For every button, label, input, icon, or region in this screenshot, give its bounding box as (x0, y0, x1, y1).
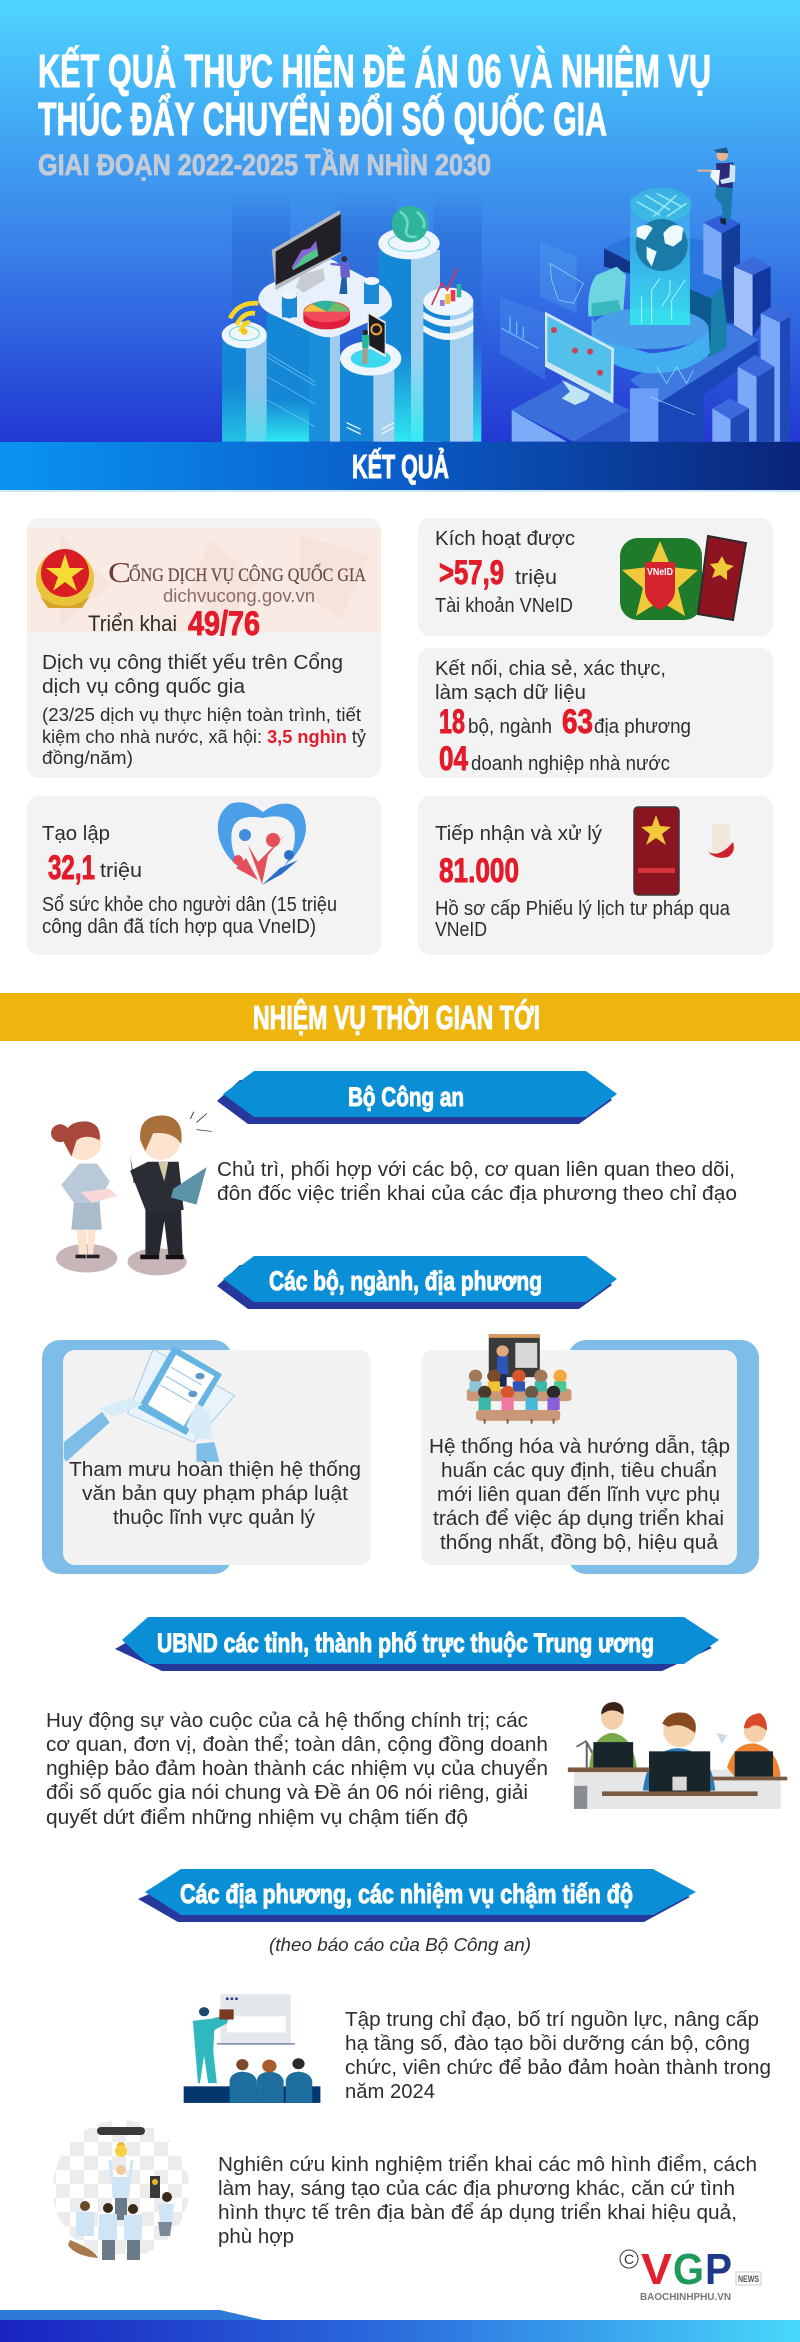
text: Hệ thống hóa và hướng dẫn, tập (429, 1435, 730, 1458)
text: UBND duties: Huy động sự vào cuộc của cả hệ thống chính trị; các (46, 1710, 528, 1732)
text: task one: hạ tầng số, đào tạo bồi dưỡng cán bộ, công (345, 2033, 750, 2055)
text: task one: Tập trung chỉ đạo, bố trí nguồn lực, nâng cấp (345, 2009, 759, 2031)
text: task two (218, 2154, 757, 2248)
text: Bộ Công an duties: đôn đốc việc triển khai của các địa phương theo chỉ đạo (217, 1183, 737, 1205)
text: trách để việc áp dụng triển khai (433, 1508, 724, 1530)
monitor with map (545, 312, 614, 405)
text: văn bản quy phạm pháp luật (82, 1483, 348, 1505)
figure: top person (110, 2160, 132, 2220)
logo: VGP: G (673, 2245, 704, 2294)
panel: VNeID accounts: Tài khoản VNeID (435, 595, 573, 617)
logo: VGP: NEWS (738, 2274, 759, 2284)
panel: health records (27, 796, 381, 955)
logo: VGP: P (705, 2245, 732, 2294)
panel: data connection: doanh nghiệp nhà nước (471, 753, 670, 775)
panel: data connection: 63 (562, 703, 593, 741)
text: task two: hình thực tế trên địa bàn để áp dụng triển khai hiệu quả, (218, 2202, 737, 2224)
icon: VNeID logo and phone: VNeID (647, 567, 673, 578)
panel: Cổng dịch vụ công: Dịch vụ công thiết yếu trên Cổng (42, 652, 343, 674)
platform blocks (512, 322, 758, 442)
text: task two: Nghiên cứu kinh nghiệm triển khai các mô hình điểm, cách (218, 2154, 757, 2176)
band: KẾT QUẢ (0, 442, 800, 492)
icon: classroom (467, 1334, 571, 1424)
panel: Cổng dịch vụ công: 49/76 (188, 605, 260, 643)
banner: UBND: UBND các tỉnh, thành phố trực thuộc Trung ương (157, 1628, 654, 1658)
icon: scroll (708, 824, 734, 858)
banner: Các bộ, ngành, địa phương (217, 1256, 617, 1309)
panel: Cổng dịch vụ công: kiệm cho nhà nước, xã hội: 3,5 nghìn tỷ (42, 726, 367, 747)
text: task two: phù hợp (218, 2226, 294, 2248)
tower: wifi (222, 303, 267, 442)
panel: judicial records: Tiếp nhận và xử lý (435, 823, 602, 845)
text: task two: làm hay, sáng tạo của các địa phương khác, căn cứ tình (218, 2178, 735, 2200)
text: UBND duties: nghiệp bảo đảm hoàn thành các nhiệm vụ của chuyển (46, 1758, 548, 1780)
figure: woman (51, 1121, 117, 1258)
banner: Các địa phương: Các địa phương, các nhiệm vụ chậm tiến độ (180, 1879, 633, 1909)
text (429, 1435, 730, 1554)
illustration: presenter (184, 1994, 320, 2103)
panel: health records: Tạo lập (42, 823, 110, 845)
text: UBND duties: đổi số quốc gia nói chung và Đề án 06 nói riêng, giải (46, 1782, 528, 1804)
panel: health records: 32,1 (48, 849, 95, 887)
banner: Bộ Công an: Bộ Công an (348, 1082, 464, 1112)
towers (703, 215, 790, 442)
text: huấn các quy định, tiêu chuẩn (441, 1460, 717, 1482)
panel: data connection: 18 (439, 703, 465, 741)
portal name (108, 558, 366, 606)
panel: health records: công dân đã tích hợp qua VneID) (42, 916, 316, 938)
text: UBND duties: quyết dứt điểm những nhiệm vụ chậm tiến độ (46, 1807, 468, 1829)
banner: Bộ Công an (217, 1071, 617, 1124)
band: NHIỆM VỤ THỜI GIAN TỚI: NHIỆM VỤ THỜI GIAN TỚI (253, 999, 540, 1036)
panel: Cổng dịch vụ công: dịch vụ công quốc gia (42, 676, 246, 698)
figure: center worker (643, 1712, 715, 1792)
platform with monitor and pie (258, 210, 392, 337)
banner: UBND (115, 1617, 719, 1671)
panel: VNeID accounts (418, 518, 773, 636)
logo: VGP: BAOCHINHPHU.VN (640, 2292, 731, 2303)
panel: health records: Sổ sức khỏe cho người dân (15 triệu (42, 894, 337, 916)
band: KẾT QUẢ: KẾT QUẢ (352, 448, 449, 485)
text: Bộ Công an duties: Chủ trì, phối hợp với các bộ, cơ quan liên quan theo dõi, (217, 1159, 735, 1181)
panel: VNeID accounts: >57,9 (439, 554, 504, 592)
logo: VGP: V (641, 2245, 673, 2294)
icon: heart family (218, 802, 306, 885)
portal name: dichvucong.gov.vn (163, 586, 315, 606)
panel: VNeID accounts: triệu (515, 567, 557, 589)
figure: right worker (717, 1713, 781, 1777)
text: task one (345, 2009, 771, 2103)
panel: Cổng dịch vụ công: (23/25 dịch vụ thực hiện toàn trình, tiết (42, 704, 361, 725)
panel: judicial records: 81.000 (439, 852, 519, 890)
figure: team (68, 2176, 174, 2260)
panel: VNeID accounts: Kích hoạt được (435, 528, 575, 550)
text: task one: chức, viên chức để bảo đảm hoàn thành trong (345, 2057, 771, 2079)
tower: chart (423, 268, 481, 442)
illustration: data towers (222, 190, 482, 442)
illustration: office workers (568, 1702, 787, 1809)
note: source: (theo báo cáo của Bộ Công an) (269, 1934, 531, 1955)
panel: Cổng dịch vụ công: đồng/năm) (42, 747, 133, 768)
illustration: team under lamp (53, 2120, 189, 2260)
tower: globe (378, 206, 443, 442)
text: thuộc lĩnh vực quản lý (113, 1507, 315, 1529)
panel: training (421, 1334, 759, 1574)
text: task one: năm 2024 (345, 2081, 435, 2103)
icon: national emblem (36, 549, 94, 608)
panel: judicial records (418, 796, 773, 955)
panel: data connection: Kết nối, chia sẻ, xác thực, (435, 658, 666, 680)
icon: phone (634, 807, 679, 895)
text: UBND duties (46, 1710, 548, 1829)
illustration: globe hologram (500, 147, 790, 442)
panel: Cổng dịch vụ công (27, 518, 381, 778)
cylinder (588, 237, 727, 373)
panel: data connection (418, 648, 773, 778)
figure: man (130, 1112, 212, 1259)
tower: tablet (340, 312, 401, 442)
portal name: C (108, 558, 131, 589)
illustration: two officials (51, 1112, 212, 1275)
panel: legal documents (42, 1340, 371, 1574)
figure: man with tablet (697, 147, 735, 225)
banner: Các bộ, ngành, địa phương: Các bộ, ngành, địa phương (269, 1266, 542, 1296)
text (69, 1459, 361, 1529)
text: Bộ Công an duties (217, 1159, 737, 1205)
panel: health records: triệu (100, 860, 142, 882)
panel: data connection: làm sạch dữ liệu (435, 682, 586, 704)
text: Tham mưu hoàn thiện hệ thống (69, 1459, 361, 1481)
panel: Cổng dịch vụ công: Triển khai (88, 611, 177, 636)
panel: judicial records: VNeID (435, 919, 487, 941)
subtitle: GIAI ĐOẠN 2022-2025 TẦM NHÌN 2030 (38, 148, 491, 182)
banner: Các địa phương (138, 1869, 696, 1922)
footer bar (0, 2310, 800, 2342)
panel: judicial records: Hồ sơ cấp Phiếu lý lịch tư pháp qua (435, 898, 731, 920)
logo: VGP (620, 2245, 761, 2303)
band: NHIỆM VỤ THỜI GIAN TỚI (0, 993, 800, 1041)
figure: left worker (589, 1702, 637, 1767)
hero background (0, 0, 800, 443)
text: UBND duties: cơ quan, đơn vị, đoàn thể; toàn dân, cộng đồng doanh (46, 1734, 548, 1756)
text: mới liên quan đến lĩnh vực phụ (437, 1484, 720, 1506)
icon: VNeID logo and phone (620, 536, 746, 620)
hologram (630, 188, 692, 325)
portal name: ỔNG DỊCH VỤ CÔNG QUỐC GIA (129, 564, 366, 586)
panel: data connection: bộ, ngành (468, 716, 552, 738)
icon: clipboard (64, 1346, 235, 1462)
panel: data connection: 04 (439, 740, 468, 778)
logo: VGP: C (624, 2251, 634, 2267)
panel: data connection: địa phương (594, 716, 691, 738)
text: thống nhất, đồng bộ, hiệu quả (440, 1532, 719, 1554)
tower: platform column (267, 313, 340, 442)
title (38, 45, 711, 145)
